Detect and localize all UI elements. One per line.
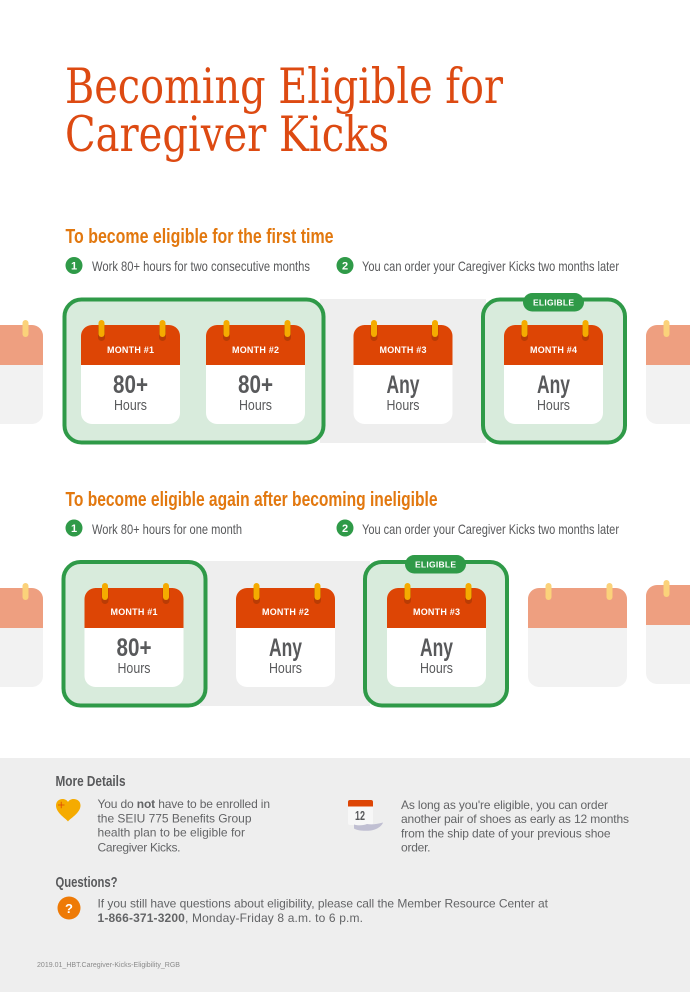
- text: order timing: As long as you're eligible, you can order: [401, 798, 608, 812]
- badge: eligible: [523, 293, 584, 312]
- calendar: month 3: [387, 583, 486, 687]
- calendar: month 4: [504, 320, 603, 424]
- text: contact: [98, 896, 549, 925]
- title: Caregiver Kicks: [65, 106, 389, 163]
- faded calendar right: [646, 580, 690, 684]
- footer code: 2019.01_HBT.Caregiver-Kicks-Eligibility_RGB: [37, 962, 180, 969]
- calendar: month 2: [206, 320, 305, 424]
- calendar timeline: eligible again: [0, 555, 690, 706]
- calendar: month 1: 80+: [116, 634, 152, 662]
- step 2: first time: [336, 257, 619, 274]
- calendar: month 3: MONTH #3: [380, 345, 426, 355]
- text: not enrolled: health plan to be eligible for: [98, 826, 245, 840]
- text: order timing: from the ship date of your previous shoe: [401, 826, 611, 840]
- calendar: month 3: Hours: [386, 397, 420, 414]
- step 2: first time: You can order your Caregiver Kicks two months later: [362, 258, 619, 274]
- title: [65, 58, 503, 163]
- calendar: month 4: MONTH #4: [530, 345, 577, 355]
- step 1: first time: [66, 257, 310, 274]
- text: not enrolled: the SEIU 775 Benefits Group: [98, 811, 252, 825]
- step 2: eligible again: You can order your Caregiver Kicks two months later: [362, 521, 619, 537]
- calendar: month 3: Any: [386, 371, 420, 399]
- heading: more details: More Details: [56, 773, 126, 790]
- calendar: month 2: [236, 583, 335, 687]
- calendar: month 1: [81, 320, 180, 424]
- calendar: month 2: 80+: [238, 371, 273, 399]
- heading: eligible again: To become eligible again after becoming ineligible: [66, 488, 438, 511]
- title: Becoming Eligible for: [65, 58, 503, 115]
- calendar: month 2: MONTH #2: [232, 345, 279, 355]
- step 1: eligible again: Work 80+ hours for one month: [92, 521, 242, 537]
- step 1: first time: 1: [71, 260, 77, 272]
- calendar: month 1: 80+: [113, 371, 148, 399]
- calendar: month 1: [84, 583, 184, 687]
- heading: questions: Questions?: [56, 874, 118, 891]
- badge: eligible: [405, 555, 466, 574]
- calendar: month 2: MONTH #2: [262, 607, 309, 617]
- faded calendar: [528, 583, 627, 687]
- text: contact: If you still have questions about eligibility, please call the Member Resource Center at: [98, 896, 549, 910]
- calendar: month 1: MONTH #1: [110, 607, 158, 617]
- heading: first time: To become eligible for the first time: [66, 225, 334, 248]
- calendar: month 4: Hours: [537, 397, 570, 414]
- calendar: month 2: Hours: [239, 397, 272, 414]
- icon: calendar with shoe: 12: [355, 808, 365, 823]
- calendar: month 2: Any: [269, 634, 302, 662]
- faded calendar right: [646, 320, 690, 424]
- calendar: month 1: Hours: [118, 660, 150, 677]
- step 2: eligible again: [336, 520, 619, 537]
- text: order timing: another pair of shoes as early as 12 months: [401, 812, 629, 826]
- calendar timeline: first time: [0, 293, 690, 443]
- calendar: month 3: [354, 320, 452, 424]
- calendar: month 4: Any: [537, 371, 570, 399]
- step 1: first time: Work 80+ hours for two consecutive months: [92, 258, 310, 274]
- icon: calendar with shoe: [348, 800, 383, 831]
- calendar: month 3: MONTH #3: [413, 607, 460, 617]
- step 2: eligible again: 2: [342, 523, 348, 535]
- text: order timing: order.: [401, 840, 430, 854]
- text: not enrolled: [98, 797, 270, 854]
- icon: question mark: [58, 896, 80, 920]
- faded calendar left: [0, 320, 43, 424]
- calendar: month 1: Hours: [114, 397, 147, 414]
- step 2: first time: 2: [342, 260, 348, 272]
- calendar: month 3: Hours: [420, 660, 453, 677]
- text: not enrolled: You do not have to be enrolled in: [98, 797, 270, 811]
- step 1: eligible again: 1: [71, 523, 77, 535]
- badge: eligible: ELIGIBLE: [533, 298, 574, 308]
- faded calendar left: [0, 583, 43, 687]
- calendar: month 3: Any: [420, 634, 453, 662]
- icon: question mark: ?: [65, 901, 73, 916]
- step 1: eligible again: [66, 520, 242, 537]
- badge: eligible: ELIGIBLE: [415, 560, 456, 570]
- icon: heart: [56, 799, 80, 822]
- calendar: month 1: MONTH #1: [107, 345, 154, 355]
- calendar: month 2: Hours: [269, 660, 302, 677]
- text: not enrolled: Caregiver Kicks.: [98, 840, 180, 854]
- text: contact: 1-866-371-3200, Monday-Friday 8 a.m. to 6 p.m.: [98, 911, 363, 925]
- panel: footer: [0, 758, 690, 992]
- text: order timing: [401, 798, 629, 854]
